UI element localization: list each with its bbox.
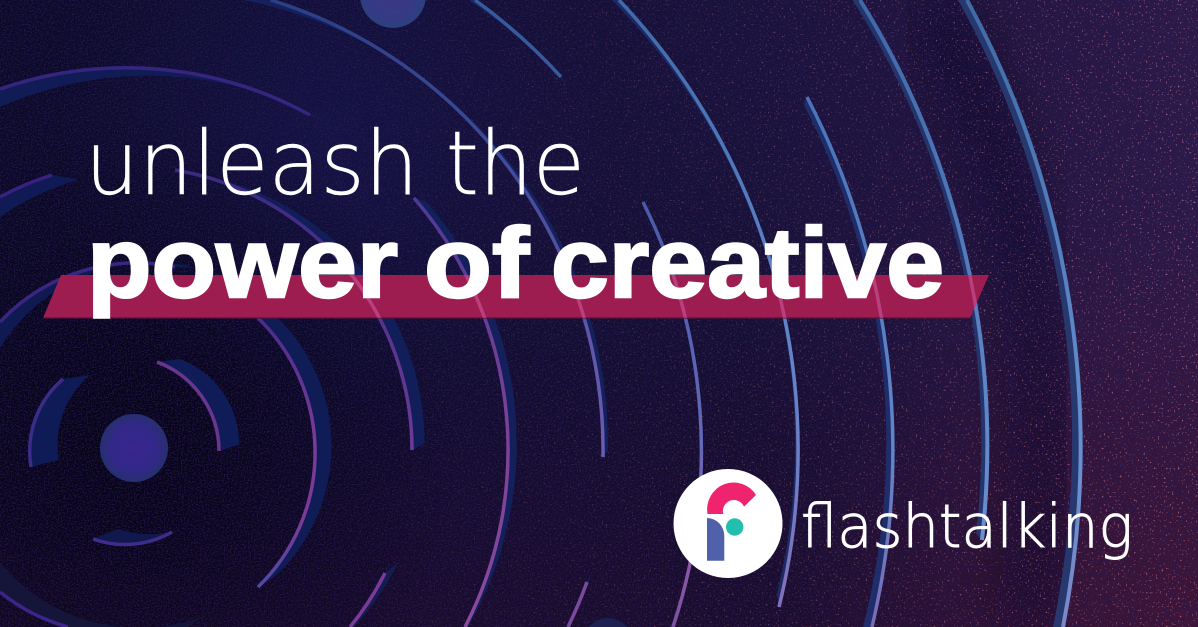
sphere: top	[360, 0, 426, 28]
ring 4	[0, 68, 517, 627]
title: line 1: unleash the	[85, 112, 585, 215]
ring 10: outermost	[958, 0, 1081, 627]
logo: blue stem	[707, 518, 724, 561]
ring 2	[0, 262, 331, 627]
sphere: bottom	[589, 618, 627, 627]
ring 8	[804, 97, 893, 627]
crimson title bar	[43, 275, 989, 319]
ring 1: innermost broken ring	[30, 359, 239, 545]
ring 7	[612, 0, 798, 607]
title: line 2: creative	[551, 207, 944, 318]
sphere: centre	[100, 414, 168, 482]
brand wordmark: flashtalking	[801, 492, 1133, 562]
ring 9	[853, 0, 987, 540]
logo badge	[674, 469, 782, 578]
ring 3	[0, 170, 424, 627]
title: line 2	[87, 207, 944, 318]
ring 5	[243, 0, 608, 627]
logo: teal dot	[726, 518, 743, 536]
title: line 2: of	[424, 207, 530, 318]
logo: pink arc	[707, 482, 756, 514]
ring 6	[469, 0, 702, 627]
title: line 2: power	[87, 207, 398, 318]
